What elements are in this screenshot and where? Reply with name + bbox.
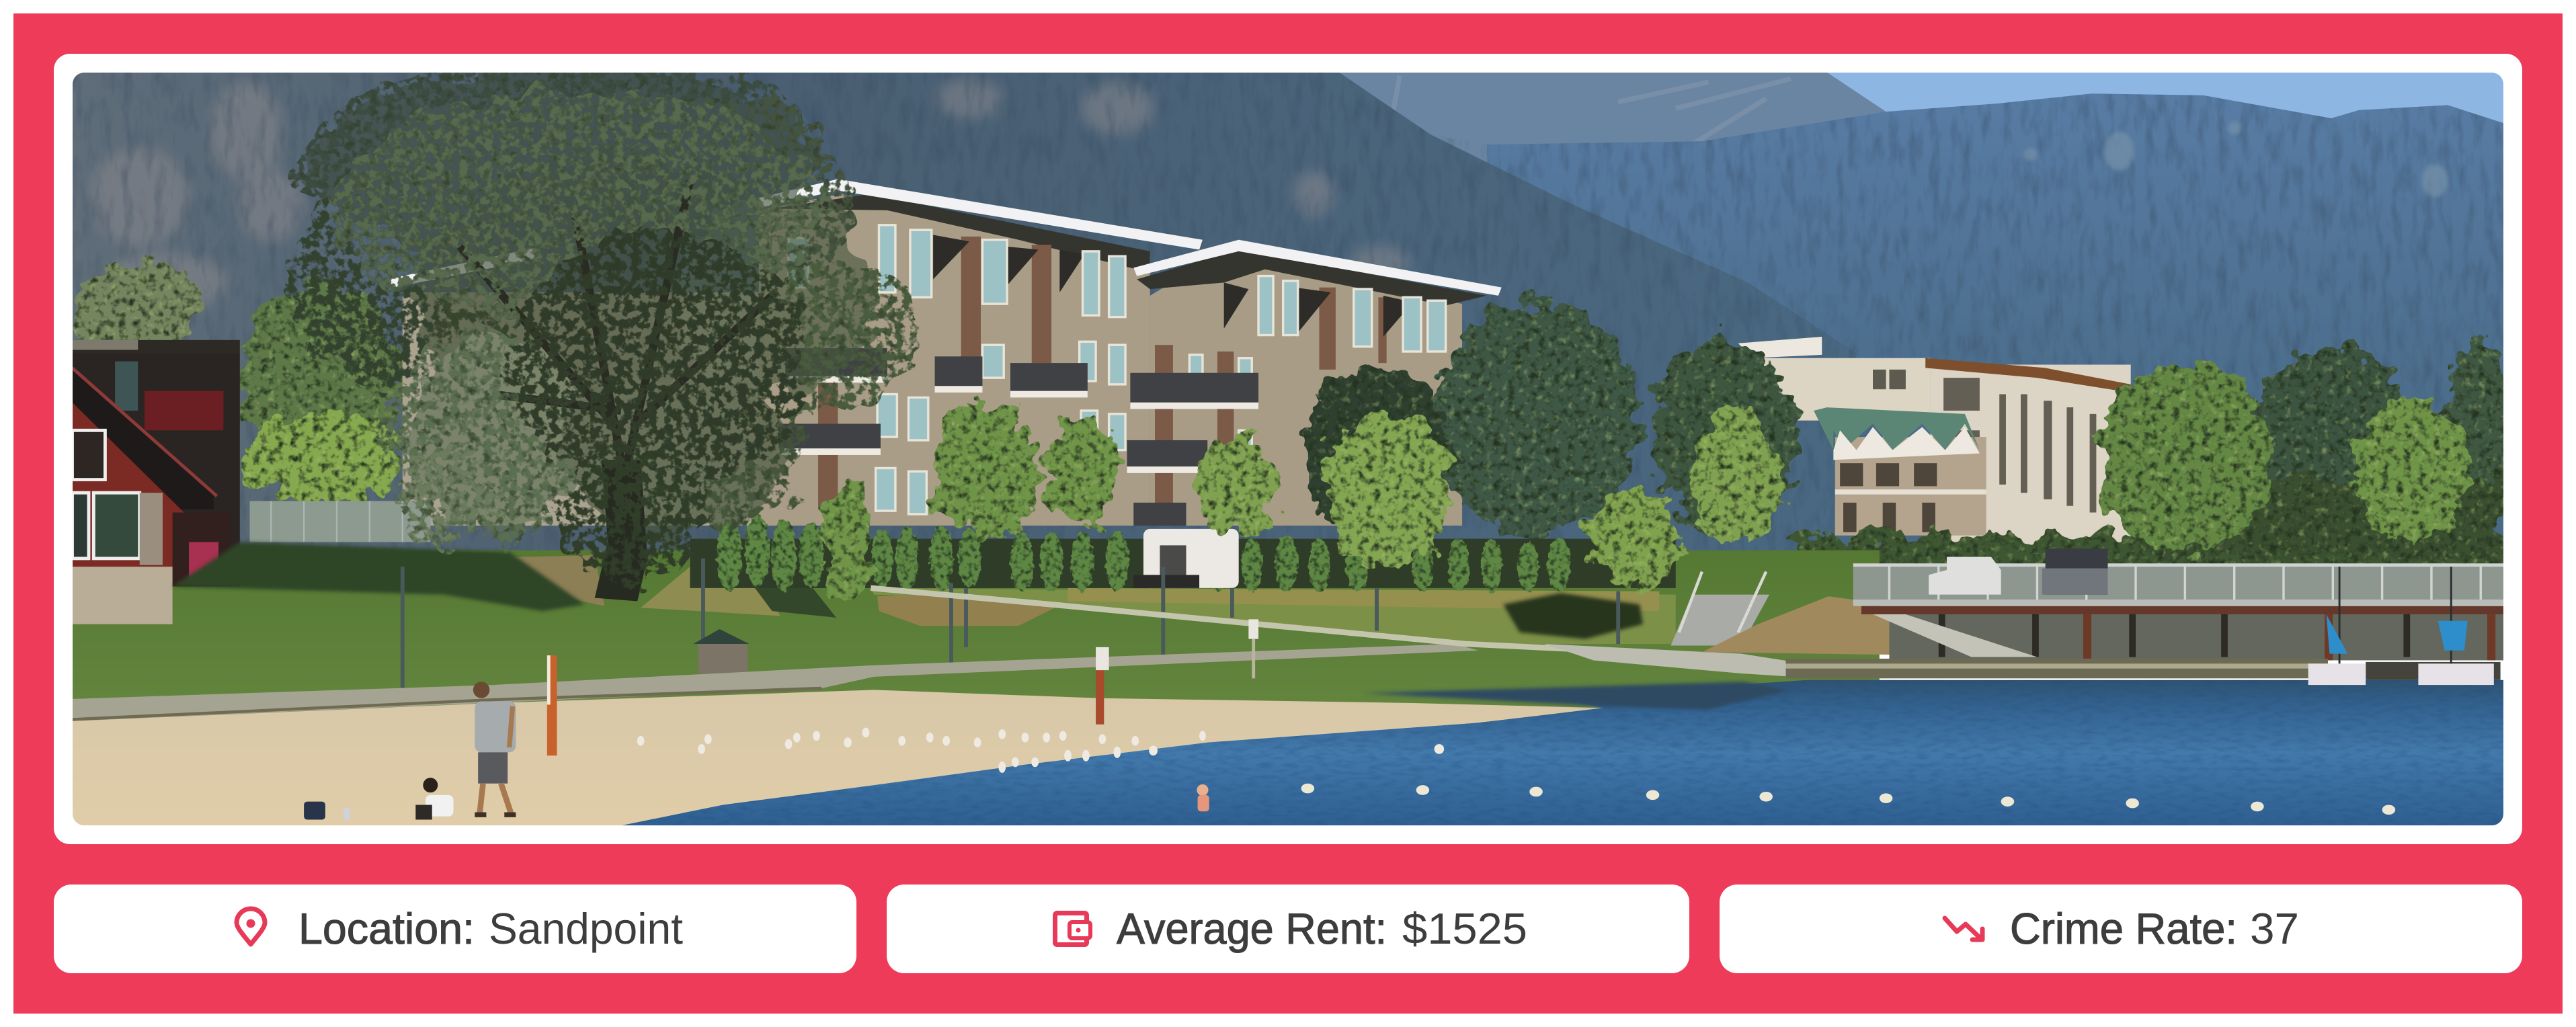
lawn shadows and berms — [173, 542, 1676, 644]
arborvitae hedge row — [717, 514, 1570, 591]
icon: map pin — [237, 909, 265, 944]
far right apartment building — [1738, 337, 2131, 548]
lawn — [73, 550, 1880, 723]
value: average rent: $1525 — [1402, 904, 1527, 953]
panel: white photo card — [54, 54, 2522, 844]
swimmer — [1197, 784, 1209, 811]
parked cars behind railing — [1929, 548, 2107, 595]
stairs — [1671, 571, 1769, 645]
right mountain range — [1487, 93, 2503, 567]
hedge shadow band — [690, 539, 1676, 588]
brick pillars — [818, 237, 1387, 526]
gulls on the sand — [637, 728, 1444, 773]
back trees — [73, 259, 2517, 575]
small kiosk on lawn — [693, 629, 749, 673]
orange beach poles — [547, 619, 1258, 755]
upper windows — [789, 225, 1446, 514]
beach sand — [73, 690, 1603, 826]
white roof bands — [388, 248, 542, 288]
moored white boats — [2308, 567, 2494, 685]
standing person — [473, 682, 516, 815]
value: location: Sandpoint — [489, 904, 683, 953]
stat pill: location — [54, 885, 856, 973]
wooden dock — [1785, 659, 2501, 680]
label: crime rate: Crime Rate: — [2010, 904, 2237, 953]
mountain forest texture — [73, 73, 2503, 565]
boardwalk railing and pier — [1853, 563, 2503, 660]
main apartment building: rear wing — [388, 179, 1502, 526]
label: average rent: Average Rent: — [1117, 904, 1387, 953]
balconies — [778, 348, 1258, 526]
dark evergreen trees in front of building — [1301, 300, 1638, 548]
white van — [1133, 529, 1239, 588]
photo: lakeside apartments and beach — [73, 58, 2517, 826]
lamp posts and signs — [403, 559, 1618, 690]
chain-link fence — [249, 501, 430, 542]
hazy patches on right range — [2024, 122, 2448, 197]
label: location: Location: — [298, 904, 475, 953]
paved paths — [73, 588, 1794, 721]
icon: downward trend arrow — [1945, 918, 1982, 940]
sky — [73, 73, 2503, 124]
stat pill: crime rate — [1720, 885, 2522, 973]
icon: wallet — [1055, 913, 1090, 945]
green deciduous trees — [821, 362, 2471, 595]
lake water — [618, 680, 2503, 826]
value: crime rate: 37 — [2250, 904, 2299, 953]
seated child and beach gear — [304, 778, 454, 819]
far mountain with ski runs — [1339, 73, 1886, 163]
stat pill: average rent — [887, 885, 1689, 973]
red lodge at left — [73, 340, 240, 624]
swim-area buoys — [1301, 784, 2395, 815]
main mountain on the left — [73, 73, 1857, 567]
grass mound — [1702, 596, 1942, 655]
soffit triangles — [933, 235, 1413, 337]
tree canopy shade underlay — [312, 69, 871, 534]
large foreground tree — [288, 58, 920, 601]
